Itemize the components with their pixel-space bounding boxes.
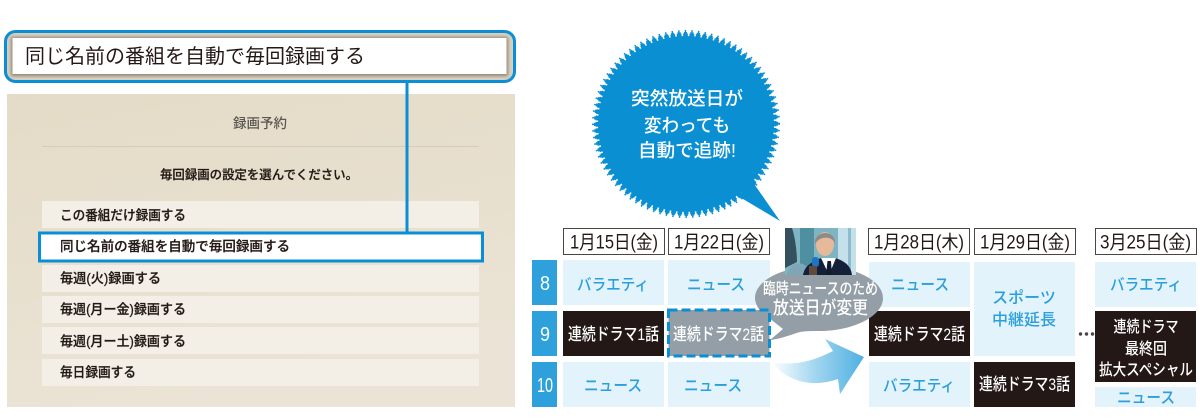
date headers: 1月28日(木): [874, 232, 964, 254]
schedule column: Jan 29: スポーツ: [992, 289, 1056, 307]
schedule column: Mar 25: バラエティ: [1110, 277, 1182, 294]
connector line: [406, 80, 408, 233]
hour labels: 10: [537, 375, 553, 397]
moved program: dashed cell: 連続ドラマ2話: [673, 325, 764, 344]
schedule column: Mar 25: 最終回: [1125, 340, 1167, 358]
hour labels: 9: [540, 324, 550, 346]
callout: selected option enlarged: [6, 32, 514, 82]
option: weekly Mon-Fri: [42, 296, 479, 323]
date headers: 3月25日(金): [1100, 232, 1191, 254]
panel title: 録画予約: [233, 116, 287, 131]
callout: selected option enlarged: 同じ名前の番組を自動で毎回録画する: [25, 45, 365, 68]
ellipsis dots: [1079, 332, 1094, 336]
option highlighted: same-name auto record: [40, 233, 482, 261]
option: weekly Mon-Sat: 毎週(月ー土)録画する: [60, 334, 186, 349]
schedule column: Jan 29: 連続ドラマ3話: [979, 375, 1070, 394]
icon: news anchor photo: [785, 228, 856, 275]
date headers: 1月22日(金): [674, 232, 764, 254]
option: this program only: [42, 201, 479, 228]
option: weekly Mon-Fri: 毎週(月ー金)録画する: [60, 302, 186, 317]
gray speech bubble: schedule change: [755, 266, 883, 340]
schedule column: Jan 29: 中継延長: [992, 311, 1056, 329]
option: this program only: この番組だけ録画する: [60, 208, 186, 223]
bubble text: [763, 280, 878, 318]
bubble text: [631, 88, 743, 161]
schedule column: Mar 25: [1095, 262, 1196, 407]
date headers: [564, 228, 1196, 254]
date headers: 1月15日(金): [570, 232, 658, 254]
schedule column: Jan 15: バラエティ: [577, 277, 649, 294]
bubble text: 自動で追跡!: [638, 140, 736, 161]
schedule column: Jan 28: バラエティ: [883, 378, 955, 395]
arrow: moved broadcast date: [771, 339, 864, 394]
schedule column: Jan 22: ニュース: [687, 277, 745, 294]
bubble text: 臨時ニュースのため: [763, 280, 878, 298]
bubble text: 放送日が変更: [773, 297, 868, 318]
option: daily: [42, 359, 479, 386]
starburst speech bubble: [593, 31, 780, 221]
schedule column: Jan 29: [974, 262, 1075, 407]
option: weekly Tuesday: 毎週(火)録画する: [60, 271, 161, 286]
date headers: 1月29日(金): [980, 232, 1070, 254]
schedule column: Jan 28: [869, 262, 970, 407]
option: daily: 毎日録画する: [60, 365, 136, 380]
option: weekly Tuesday: [42, 265, 479, 292]
moved program: dashed cell: [668, 310, 770, 356]
schedule column: Mar 25: ニュース: [1117, 390, 1175, 407]
schedule column: Jan 15: ニュース: [584, 378, 642, 395]
bubble text: 突然放送日が: [631, 88, 743, 109]
hour labels: 8: [540, 273, 550, 295]
panel: recording reservation screen: [7, 94, 515, 407]
schedule column: Jan 28: 連続ドラマ2話: [874, 325, 965, 344]
option: weekly Mon-Sat: [42, 327, 479, 354]
bubble text: 変わっても: [644, 115, 730, 136]
schedule column: Jan 15: [563, 260, 664, 407]
option highlighted: same-name auto record: 同じ名前の番組を自動で毎回録画する: [60, 238, 290, 254]
schedule column: Jan 15: 連続ドラマ1話: [568, 325, 659, 344]
hour labels: [532, 260, 557, 407]
schedule column: Mar 25: 連続ドラマ: [1114, 318, 1178, 336]
schedule column: Jan 22: [668, 260, 770, 407]
instruction text: 毎回録画の設定を選んでください。: [160, 167, 358, 182]
schedule column: Jan 28: ニュース: [891, 277, 949, 294]
schedule column: Jan 22: ニュース: [684, 378, 742, 395]
